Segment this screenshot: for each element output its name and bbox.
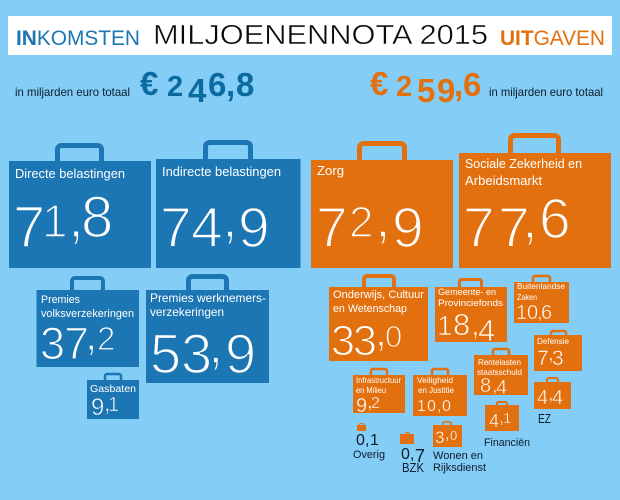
suitcase: indirecte belastingen [156, 142, 300, 268]
value: 1 [503, 410, 511, 427]
total value: 4 [188, 72, 207, 109]
suitcase: onderwijs, cultuur en wetenschap [329, 276, 428, 365]
value: 0 [385, 319, 402, 354]
value: 3 [331, 317, 355, 365]
value: , [522, 187, 538, 251]
value: 1 [108, 394, 119, 416]
value: 2 [97, 320, 115, 357]
value: 8 [81, 185, 113, 250]
value: 2 [349, 198, 373, 247]
value: , [471, 307, 480, 342]
value: 9 [238, 196, 270, 260]
caption: in miljarden euro totaal [489, 85, 603, 99]
value: 1 [42, 195, 68, 247]
label line 2: verzekeringen [150, 305, 224, 319]
suitcase: ez [534, 378, 571, 409]
label: Buitenlandse [517, 281, 565, 291]
value: , [365, 432, 369, 449]
label: Premies werknemers- [150, 291, 266, 305]
title: MILJOENENNOTA 2015 [153, 19, 488, 50]
value: 3 [181, 322, 212, 385]
label line 2: Zaken [517, 292, 537, 302]
suitcase: buitenlandse zaken [514, 276, 569, 324]
label: Gemeente- en [438, 287, 496, 298]
value: 7 [316, 196, 348, 260]
value: 0 [401, 446, 410, 463]
value: 4 [489, 411, 499, 431]
label line 2: staatsschuld [477, 367, 522, 377]
label line 2: en Milieu [356, 386, 386, 395]
total value: , [454, 66, 463, 103]
label line 2: Arbeidsmarkt [465, 173, 542, 188]
label: Wonen en [433, 450, 483, 462]
value: , [537, 302, 543, 324]
value: 7 [64, 318, 89, 369]
value: , [445, 424, 450, 443]
suitcase: wonen en rijksdienst [433, 422, 486, 474]
total value: 6 [208, 66, 226, 103]
value: 9 [356, 395, 367, 417]
title bar [8, 16, 612, 55]
value: 5 [150, 322, 181, 385]
value: 0 [527, 302, 538, 324]
total value: 5 [417, 72, 435, 109]
suitcase: zorg [311, 144, 453, 268]
label line 2: volksverzekeringen [41, 308, 134, 320]
label: Sociale Zekerheid en [465, 156, 582, 171]
suitcase: infrastructuur en milieu [353, 369, 405, 417]
label: Veiligheid [417, 375, 453, 385]
label: Zorg [317, 163, 344, 178]
expenditure total [370, 65, 603, 109]
value: 6 [539, 187, 571, 251]
value: 3 [435, 428, 444, 447]
label: financien: Financiën [484, 437, 530, 449]
value: 6 [541, 302, 552, 324]
label: Gasbaten [90, 384, 136, 395]
value: 7 [13, 195, 45, 260]
value: , [375, 186, 391, 250]
caption: in miljarden euro totaal [15, 85, 130, 99]
value: 3 [40, 318, 65, 369]
label: Onderwijs, Cultuur [333, 289, 424, 301]
label: Directe belastingen [15, 166, 125, 181]
total value: 6 [463, 66, 481, 103]
heading: uitgaven: UITGAVEN [500, 27, 605, 50]
value: , [68, 185, 84, 250]
label line 2: Provinciefonds [438, 298, 503, 309]
value: 9 [91, 394, 104, 421]
value: , [437, 398, 441, 415]
value: 0 [450, 428, 457, 443]
value: 3 [353, 317, 377, 365]
suitcase: defensie [534, 331, 582, 371]
value: 1 [370, 432, 379, 449]
suitcase: sociale zekerheid en arbeidsmarkt [459, 136, 611, 268]
total value: 2 [167, 71, 183, 103]
value: 8 [480, 375, 491, 397]
suitcase: premies werknemersverzekeringen [146, 276, 269, 385]
value: 4 [537, 387, 548, 409]
suitcase: directe belastingen [9, 146, 151, 268]
value: 0 [427, 398, 436, 415]
value: 2 [371, 395, 380, 412]
value: , [85, 309, 98, 360]
suitcase: veiligheid en justitie [413, 369, 467, 416]
label: Overig [353, 449, 385, 461]
value: 0 [442, 398, 451, 415]
label line 2: en Wetenschap [333, 303, 407, 315]
total value: € [140, 65, 158, 102]
value: , [367, 391, 373, 413]
value: , [410, 446, 414, 463]
label line 2: Rijksdienst [433, 462, 486, 474]
value: , [222, 186, 238, 250]
total value: 2 [396, 71, 412, 103]
label: Infrastructuur [356, 376, 401, 385]
value: 1 [516, 302, 527, 324]
value: 0 [356, 432, 365, 449]
suitcase: financien [485, 402, 519, 431]
value: , [104, 390, 111, 417]
value: , [548, 383, 554, 405]
value: 9 [392, 196, 424, 260]
value: , [208, 312, 224, 375]
value: 7 [463, 196, 495, 260]
value: 9 [225, 322, 256, 385]
value: 7 [160, 196, 192, 260]
value: 1 [437, 310, 453, 341]
value: 4 [478, 313, 495, 348]
suitcase: premies volksverzekeringen [36, 278, 139, 369]
value: 3 [552, 347, 564, 370]
value: 4 [496, 377, 507, 399]
value: 7 [537, 347, 549, 370]
label: Defensie [537, 336, 569, 346]
suitcase: gasbaten [87, 374, 139, 421]
label: Premies [41, 294, 80, 306]
value: 7 [415, 446, 425, 466]
value: , [492, 375, 498, 397]
value: , [499, 407, 504, 427]
label: Rentelasten [478, 357, 521, 367]
label: BZK [402, 460, 424, 475]
suitcase: bzk [400, 432, 425, 475]
suitcase: rentelasten staatsschuld [474, 349, 528, 399]
suitcase: overig [353, 424, 385, 461]
income total [15, 65, 254, 109]
value: 7 [498, 196, 530, 260]
total value: , [226, 66, 235, 103]
label line 2: en Justitie [418, 385, 454, 395]
value: , [375, 308, 387, 356]
label: Indirecte belastingen [162, 164, 281, 179]
value: 8 [453, 307, 470, 342]
total value: 9 [437, 72, 455, 109]
suitcase: gemeente- en provinciefonds [435, 280, 507, 348]
value: 1 [417, 398, 426, 415]
label: ez: EZ [538, 411, 551, 426]
total value: € [370, 65, 388, 102]
heading: inkomsten: INKOMSTEN [16, 27, 140, 50]
value: , [548, 342, 554, 365]
value: 4 [552, 387, 563, 409]
value: 4 [191, 196, 223, 260]
total value: 8 [236, 66, 254, 103]
